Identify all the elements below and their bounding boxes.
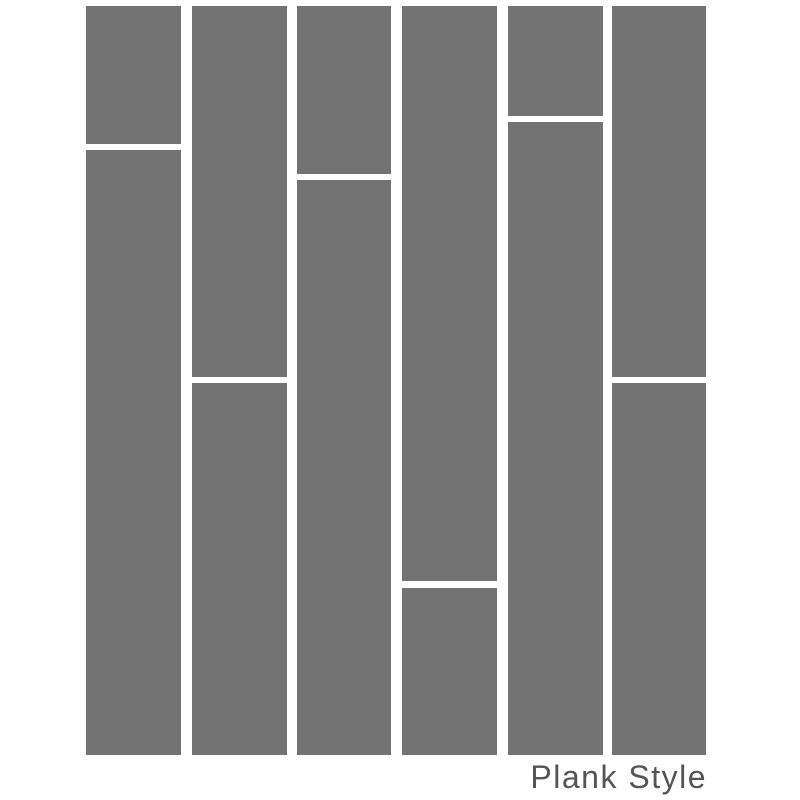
caption: Plank Style (530, 759, 707, 795)
plank pattern (86, 6, 706, 755)
column 1 planks (86, 6, 181, 144)
